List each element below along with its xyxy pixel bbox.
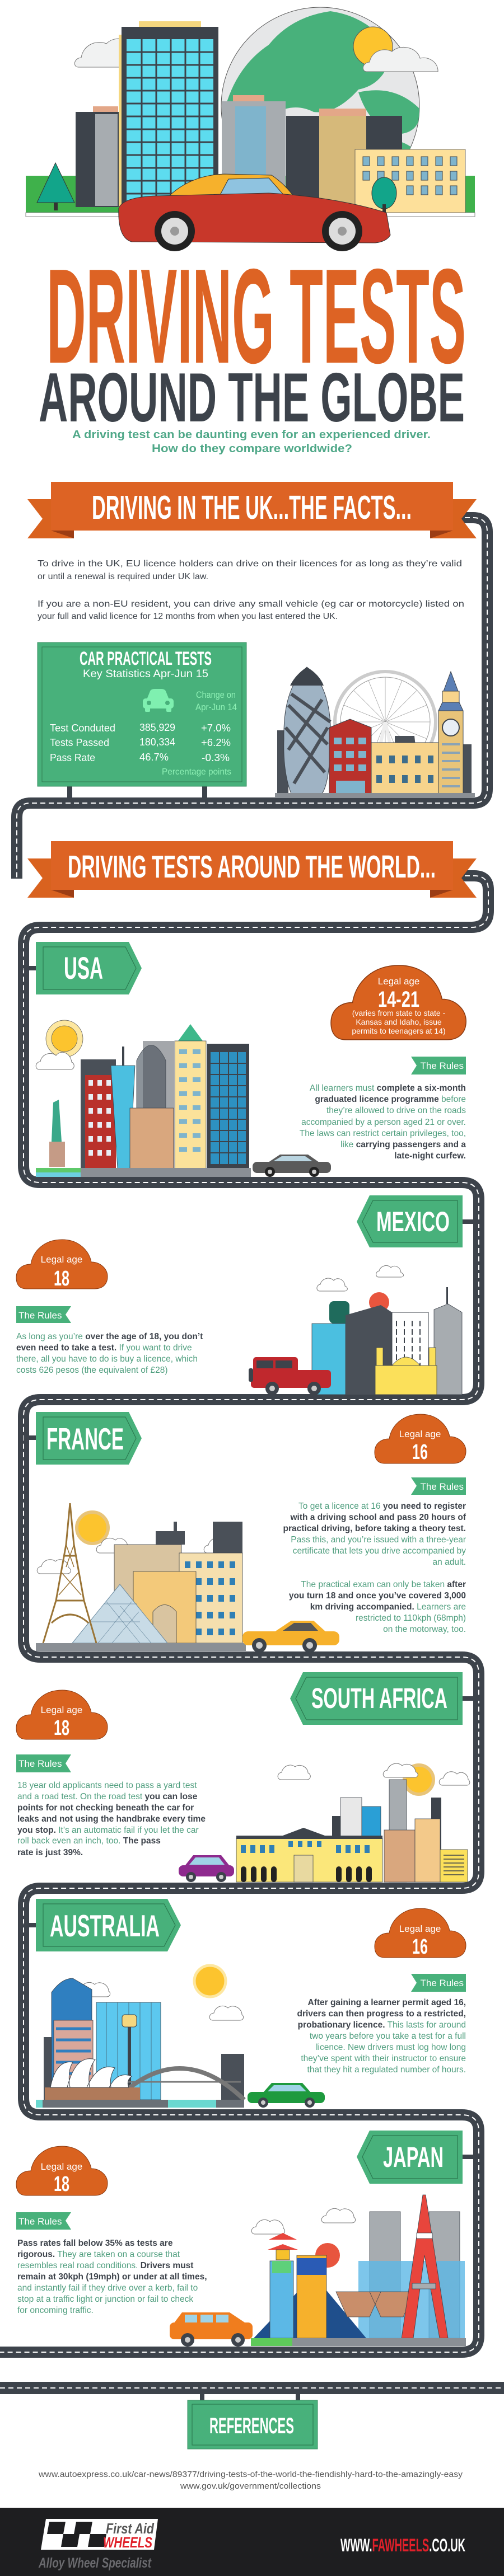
panel: car practical tests stats: Key Statistics Apr-Jun 15 xyxy=(83,668,208,680)
cloud: legal age Mexico: Legal age xyxy=(41,1254,82,1265)
panel: France xyxy=(24,1412,466,1653)
sign: Mexico: MEXICO xyxy=(376,1206,450,1237)
text: USA rules: The laws can restrict certain privileges, too, xyxy=(300,1129,466,1138)
illustration: Paris skyline xyxy=(36,1503,246,1651)
tab: the rules Australia: The Rules xyxy=(421,1978,464,1988)
icon: red building xyxy=(329,719,371,795)
tab: the rules Mexico: The Rules xyxy=(18,1310,62,1321)
text block: UK facts: your full and valid licence for 12 months from when you last entered the UK. xyxy=(38,612,338,621)
icon: purple car xyxy=(179,1855,234,1882)
text: Japan rules: stop at a traffic light or junction or fail to check xyxy=(17,2295,193,2304)
logo: First Aid Wheels xyxy=(38,2519,158,2571)
icon: london eye xyxy=(335,672,436,795)
icon: gherkin xyxy=(284,667,330,794)
cloud: legal age France xyxy=(375,1414,466,1464)
cloud: legal age South Africa: Legal age xyxy=(41,1705,82,1715)
sign: USA xyxy=(24,942,142,994)
cloud: legal age USA: Legal age xyxy=(378,976,419,987)
roads xyxy=(0,518,504,2388)
cloud: legal age Mexico xyxy=(16,1240,108,1291)
text: Australia rules: drivers can then progress to a restricted, xyxy=(297,2009,466,2019)
tab: the rules South Africa xyxy=(16,1754,71,1772)
subtitle xyxy=(72,429,431,455)
cloud: legal age USA: 14-21 xyxy=(378,987,419,1012)
sign: references: REFERENCES xyxy=(209,2414,294,2438)
subtitle: How do they compare worldwide? xyxy=(152,443,352,455)
icon: tree right xyxy=(372,177,396,213)
text: France rules: you turn 18 and once you’ve covered 3,000 xyxy=(289,1591,466,1601)
illustration: New York skyline xyxy=(36,1020,251,1177)
text: South Africa rules: you stop. It’s an automatic fail if you let the car xyxy=(17,1826,199,1835)
text: Australia rules: licence. New drivers must log how long xyxy=(316,2043,466,2052)
text block: UK facts: If you are a non-EU resident, you can drive any small vehicle (eg car or motorcycle) listed on xyxy=(38,599,464,609)
sign: France: FRANCE xyxy=(46,1421,124,1456)
cloud: legal age USA: Kansas and Idaho, issue xyxy=(356,1017,442,1026)
text: France rules: certificate that lets you drive accompanied by xyxy=(293,1546,466,1556)
text: France rules: To get a licence at 16 you need to register xyxy=(298,1502,466,1511)
sign: Australia xyxy=(24,1899,181,1951)
text: Australia rules: probationary licence. This lasts for around xyxy=(298,2020,466,2030)
panel: car practical tests stats: 46.7% xyxy=(139,752,169,763)
cloud: legal age USA: permits to teenagers at 14) xyxy=(352,1026,446,1035)
subtitle: A driving test can be daunting even for an experienced driver. xyxy=(72,429,431,441)
text: Mexico rules: there, all you have to do is buy a licence, which xyxy=(16,1354,198,1364)
tab: the rules USA: The Rules xyxy=(421,1061,464,1071)
text: Japan rules: and instantly fail if they drive over a kerb, fail to xyxy=(17,2283,198,2293)
text: USA rules: graduated licence programme before xyxy=(315,1095,466,1104)
text: reference urls xyxy=(38,2470,463,2491)
tab: the rules France xyxy=(411,1477,466,1495)
panel: car practical tests stats: Pass Rate xyxy=(50,752,95,763)
text: France rules: an adult. xyxy=(433,1557,466,1567)
sign: references xyxy=(188,2393,318,2449)
panel: Mexico xyxy=(16,1195,480,1395)
icon: parliament xyxy=(371,743,438,795)
panel: car practical tests stats: +6.2% xyxy=(201,737,231,748)
cloud: legal age France: 16 xyxy=(412,1441,428,1464)
icon: tokyo tower xyxy=(402,2195,448,2338)
text: France rules: practical driving, before taking a theory test. xyxy=(283,1524,466,1533)
footer xyxy=(0,2508,504,2576)
cloud: legal age Mexico: 18 xyxy=(54,1267,69,1291)
grass xyxy=(26,176,475,213)
text: France rules xyxy=(283,1502,466,1634)
sign: South Africa xyxy=(290,1672,480,1725)
text: Mexico rules: even need to take a test. If you want to drive xyxy=(16,1343,192,1353)
cloud: legal age Japan xyxy=(16,2146,108,2196)
sign: Australia: AUSTRALIA xyxy=(50,1908,160,1943)
text: Australia rules: that they hit a regulated number of hours. xyxy=(307,2065,466,2075)
logo: First Aid Wheels: WHEELS xyxy=(103,2534,152,2551)
sign: Japan xyxy=(357,2131,480,2184)
text block: UK facts xyxy=(38,559,464,621)
tab: the rules France: The Rules xyxy=(421,1481,464,1492)
text: Japan rules: Pass rates fall below 35% as tests are xyxy=(17,2239,173,2248)
cloud: legal age USA xyxy=(331,965,466,1040)
tab: the rules Japan xyxy=(16,2212,71,2230)
text: USA rules xyxy=(300,1083,466,1161)
cloud: legal age South Africa: 18 xyxy=(54,1716,69,1740)
panel: car practical tests stats: Percentage points xyxy=(162,767,231,777)
tab: the rules Japan: The Rules xyxy=(18,2216,62,2227)
logo: First Aid Wheels: Alloy Wheel Specialist xyxy=(38,2555,152,2571)
tab: the rules Mexico xyxy=(16,1306,71,1323)
illustration: Sydney skyline xyxy=(36,1965,244,2108)
icon: tree left xyxy=(37,163,74,210)
icon: red car xyxy=(119,174,390,251)
text: Japan rules: rigorous. They are taken on a course that xyxy=(17,2250,180,2259)
panel: car practical tests stats: 180,334 xyxy=(139,736,175,748)
panel: car practical tests stats: CAR PRACTICAL TESTS xyxy=(80,648,212,669)
panel: car practical tests stats: +7.0% xyxy=(201,722,231,734)
text: France rules: The practical exam can only be taken after xyxy=(301,1580,466,1589)
text: France rules: km driving accompanied. Learners are xyxy=(310,1602,466,1612)
text: website url: WWW.FAWHEELS.CO.UK xyxy=(340,2535,465,2555)
icon: sun xyxy=(353,27,393,66)
hero illustration: city, globe and car xyxy=(26,7,475,251)
text: South Africa rules xyxy=(17,1781,206,1857)
icon: red jeep xyxy=(249,1357,331,1395)
logo: First Aid Wheels: First Aid xyxy=(106,2520,155,2537)
panel: car practical tests stats xyxy=(38,642,246,800)
text: Japan rules: for oncoming traffic. xyxy=(17,2306,94,2315)
cloud: legal age Australia xyxy=(375,1908,466,1959)
panel: car practical tests stats: Tests Passed xyxy=(50,737,109,748)
text: France rules: restricted to 110kph (68mph) xyxy=(356,1613,466,1623)
panel: car practical tests stats: Apr-Jun 14 xyxy=(195,702,237,712)
text: Mexico rules xyxy=(16,1332,203,1375)
text: Australia rules xyxy=(297,1998,466,2075)
text block: UK facts: or until a renewal is required under UK law. xyxy=(38,572,208,581)
text: Australia rules: two years before you take a test for a full xyxy=(310,2031,466,2041)
text: Japan rules: remain at 30kph (19mph) or under at all times, xyxy=(17,2272,207,2282)
icon: car xyxy=(143,689,174,712)
cloud: legal age Australia: 16 xyxy=(412,1935,428,1959)
tab: the rules USA xyxy=(411,1057,466,1074)
icon: cloud left xyxy=(74,39,157,67)
text: Australia rules: they’ve spent with their instructor to ensure xyxy=(301,2054,466,2063)
illustration: London skyline xyxy=(275,667,475,798)
text: reference urls: www.autoexpress.co.uk/car-news/89377/driving-tests-of-the-world-the-fiendishly-hard-to-the-amazingly-easy xyxy=(38,2470,463,2479)
panel: Australia xyxy=(24,1899,466,2108)
banner: driving in the UK xyxy=(27,482,477,538)
icon: green car xyxy=(248,2083,325,2108)
text: USA rules: late-night curfew. xyxy=(394,1151,466,1161)
icon: globe xyxy=(221,7,420,176)
text: Mexico rules: As long as you’re over the age of 18, you don’t xyxy=(16,1332,203,1341)
text: South Africa rules: roll back even an inch, too. The pass xyxy=(17,1836,161,1846)
illustration: Johannesburg skyline xyxy=(236,1763,470,1882)
panel: car practical tests stats: 385,929 xyxy=(139,722,175,733)
icon: yellow car xyxy=(242,1621,339,1653)
icon: cloud right xyxy=(363,47,438,72)
sign: France xyxy=(24,1412,142,1465)
cloud: legal age France: Legal age xyxy=(399,1429,441,1439)
buildings xyxy=(76,21,465,213)
text: USA rules: accompanied by a person aged 21 or over. xyxy=(301,1118,466,1127)
cloud: legal age Australia: Legal age xyxy=(399,1923,441,1934)
text: France rules: Pass this, and you’re issued with a three-year xyxy=(291,1535,466,1545)
panel: Japan xyxy=(16,2131,480,2347)
panel: car practical tests stats: -0.3% xyxy=(202,752,230,763)
icon: grey car xyxy=(253,1155,331,1177)
panel: car practical tests stats: Test Conduted xyxy=(50,722,115,734)
icon: orange van xyxy=(170,2312,253,2347)
text: South Africa rules: leaks and not using the handbrake every time xyxy=(17,1814,206,1824)
icon: eiffel tower xyxy=(43,1503,96,1643)
sign: USA: USA xyxy=(64,950,103,986)
cloud: legal age South Africa xyxy=(16,1690,108,1740)
banner: driving tests around the world xyxy=(27,841,477,898)
text: South Africa rules: points for not checking beneath the car for xyxy=(17,1803,194,1813)
text: Australia rules: After gaining a learner permit aged 16, xyxy=(307,1998,466,2007)
text: Japan rules: resembles real road conditions. Drivers must xyxy=(17,2261,193,2270)
text: Japan rules xyxy=(17,2239,207,2315)
text: France rules: on the motorway, too. xyxy=(383,1625,466,1634)
illustration: Tokyo skyline xyxy=(251,2195,466,2346)
panel: USA xyxy=(24,942,466,1177)
text: Mexico rules: costs 626 pesos (the equivalent of £28) xyxy=(16,1366,168,1375)
text: France rules: with a driving school and pass 20 hours of xyxy=(290,1513,466,1522)
text: USA rules: like carrying passengers and a xyxy=(340,1140,466,1149)
text: South Africa rules: rate is just 39%. xyxy=(17,1848,83,1857)
sign: Japan: JAPAN xyxy=(383,2141,444,2173)
text: USA rules: they’re allowed to drive on the roads xyxy=(326,1106,466,1115)
text: South Africa rules: and a road test. On the road test you can lose xyxy=(17,1792,198,1801)
panel: South Africa xyxy=(16,1672,480,1882)
text: South Africa rules: 18 year old applicants need to pass a yard test xyxy=(17,1781,197,1790)
panel: car practical tests stats: Change on xyxy=(196,689,236,700)
tab: the rules Australia xyxy=(411,1974,466,1992)
tab: the rules South Africa: The Rules xyxy=(18,1758,62,1769)
text block: UK facts: To drive in the UK, EU licence holders can drive on their licences for as long as they’re valid xyxy=(38,559,462,569)
text: reference urls: www.gov.uk/government/collections xyxy=(180,2481,321,2491)
icon: big ben xyxy=(438,672,463,795)
cloud: legal age Japan: 18 xyxy=(54,2173,69,2196)
cloud: legal age USA: (varies from state to state - xyxy=(352,1008,446,1017)
text: USA rules: All learners must complete a six-month xyxy=(310,1083,466,1093)
illustration: Mexico City skyline xyxy=(312,1265,462,1395)
cloud: legal age Japan: Legal age xyxy=(41,2161,82,2172)
sign: Mexico xyxy=(357,1195,480,1247)
